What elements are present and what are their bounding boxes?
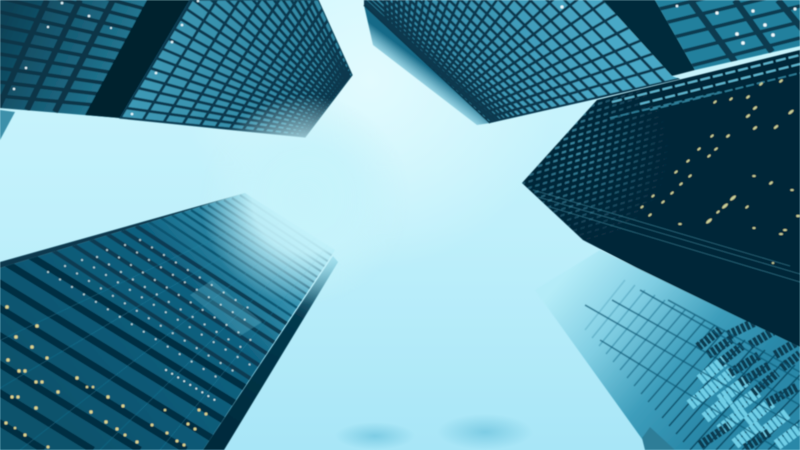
building: top left xyxy=(0,0,354,138)
building: bottom right in fog xyxy=(535,250,800,450)
floor bands xyxy=(0,256,247,450)
building: right dark tower xyxy=(500,50,800,347)
top bright window rows xyxy=(612,55,800,104)
up-right window strips xyxy=(585,280,800,450)
bright windows xyxy=(690,360,800,445)
yellow window lights xyxy=(640,79,800,264)
building: bottom left xyxy=(0,146,440,450)
underside strips xyxy=(533,190,800,282)
reflection patch xyxy=(190,280,262,336)
building: top centre right xyxy=(328,0,800,144)
dark distant tower tip xyxy=(642,427,675,450)
building dark side edge xyxy=(203,256,338,450)
rows of white lights xyxy=(48,240,257,378)
small distant building at left edge xyxy=(0,110,15,140)
fog over the bottom left building top xyxy=(200,95,410,305)
long floor lines xyxy=(585,290,800,450)
window lights xyxy=(13,0,199,115)
column lines xyxy=(0,240,278,450)
window lights xyxy=(560,5,796,45)
yellow window lights xyxy=(4,305,208,448)
dark windows xyxy=(698,322,800,445)
